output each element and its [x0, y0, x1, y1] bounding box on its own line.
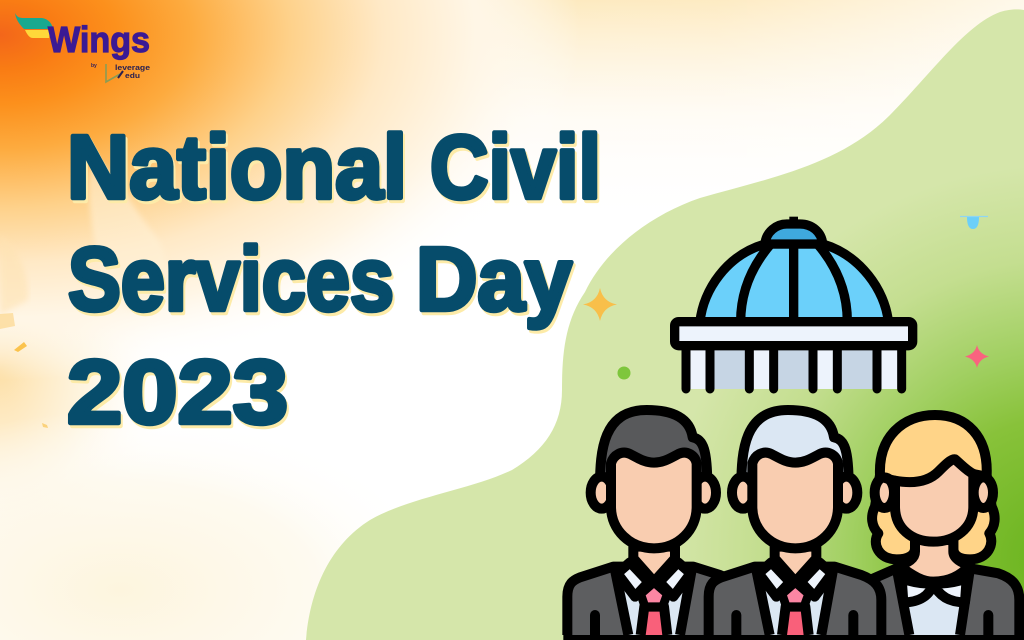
collars	[759, 562, 832, 597]
tie knot	[782, 582, 809, 607]
icon: gold sparkle	[583, 288, 617, 321]
person: woman	[870, 415, 1019, 635]
logo byline: leverage	[115, 63, 150, 72]
person: man with grey hair	[709, 410, 881, 635]
suit	[709, 567, 881, 635]
title: Services	[68, 230, 394, 330]
neck	[775, 547, 816, 582]
icon: logo wing	[15, 13, 53, 38]
woman blouse	[897, 568, 970, 635]
columns	[686, 346, 902, 389]
woman neck	[898, 540, 970, 582]
title: National	[67, 118, 407, 218]
shirt	[618, 580, 690, 635]
logo byline: by	[91, 63, 97, 69]
tie	[641, 607, 667, 635]
hair	[741, 410, 849, 487]
dome cap	[765, 224, 823, 244]
ears	[732, 477, 754, 509]
suit	[567, 567, 740, 635]
neck	[633, 547, 675, 582]
title: 2023	[67, 343, 288, 443]
woman face	[895, 459, 973, 542]
dome finial	[781, 217, 807, 224]
logo wordmark: Wings	[48, 19, 150, 60]
title	[67, 118, 601, 443]
entablature	[675, 322, 913, 346]
woman ears	[875, 477, 894, 508]
title: Day	[416, 230, 572, 330]
dome ribs	[741, 245, 847, 322]
green blob	[306, 9, 1024, 640]
hair	[600, 410, 707, 487]
woman suit	[870, 568, 1019, 635]
icon: pink sparkle	[965, 345, 989, 368]
lapels	[756, 570, 833, 635]
title: Civil	[430, 118, 601, 218]
tie	[782, 607, 809, 635]
woman arm crease	[973, 615, 1003, 635]
woman collar	[902, 578, 967, 602]
icon: green dot	[618, 366, 630, 380]
lapels	[615, 570, 692, 635]
bottom outline of suits	[563, 635, 1024, 640]
collars	[617, 562, 691, 597]
dome glass	[700, 244, 888, 322]
logo byline	[91, 63, 150, 82]
woman hair back	[872, 415, 995, 559]
arm crease	[580, 615, 610, 635]
face	[752, 453, 838, 548]
shirt	[760, 580, 831, 635]
woman fringe lines	[882, 474, 987, 481]
face	[611, 453, 697, 548]
icon: blue hanging shape	[960, 216, 988, 229]
icon: parliament dome	[675, 217, 913, 389]
person: man with dark hair	[567, 410, 740, 635]
ears	[591, 477, 613, 509]
tie knot	[641, 582, 667, 607]
logo byline: edu	[125, 71, 140, 80]
arm creases	[736, 615, 853, 635]
people group	[563, 410, 1024, 640]
logo: Wings by leverage edu	[15, 13, 150, 82]
column backing	[687, 346, 903, 389]
